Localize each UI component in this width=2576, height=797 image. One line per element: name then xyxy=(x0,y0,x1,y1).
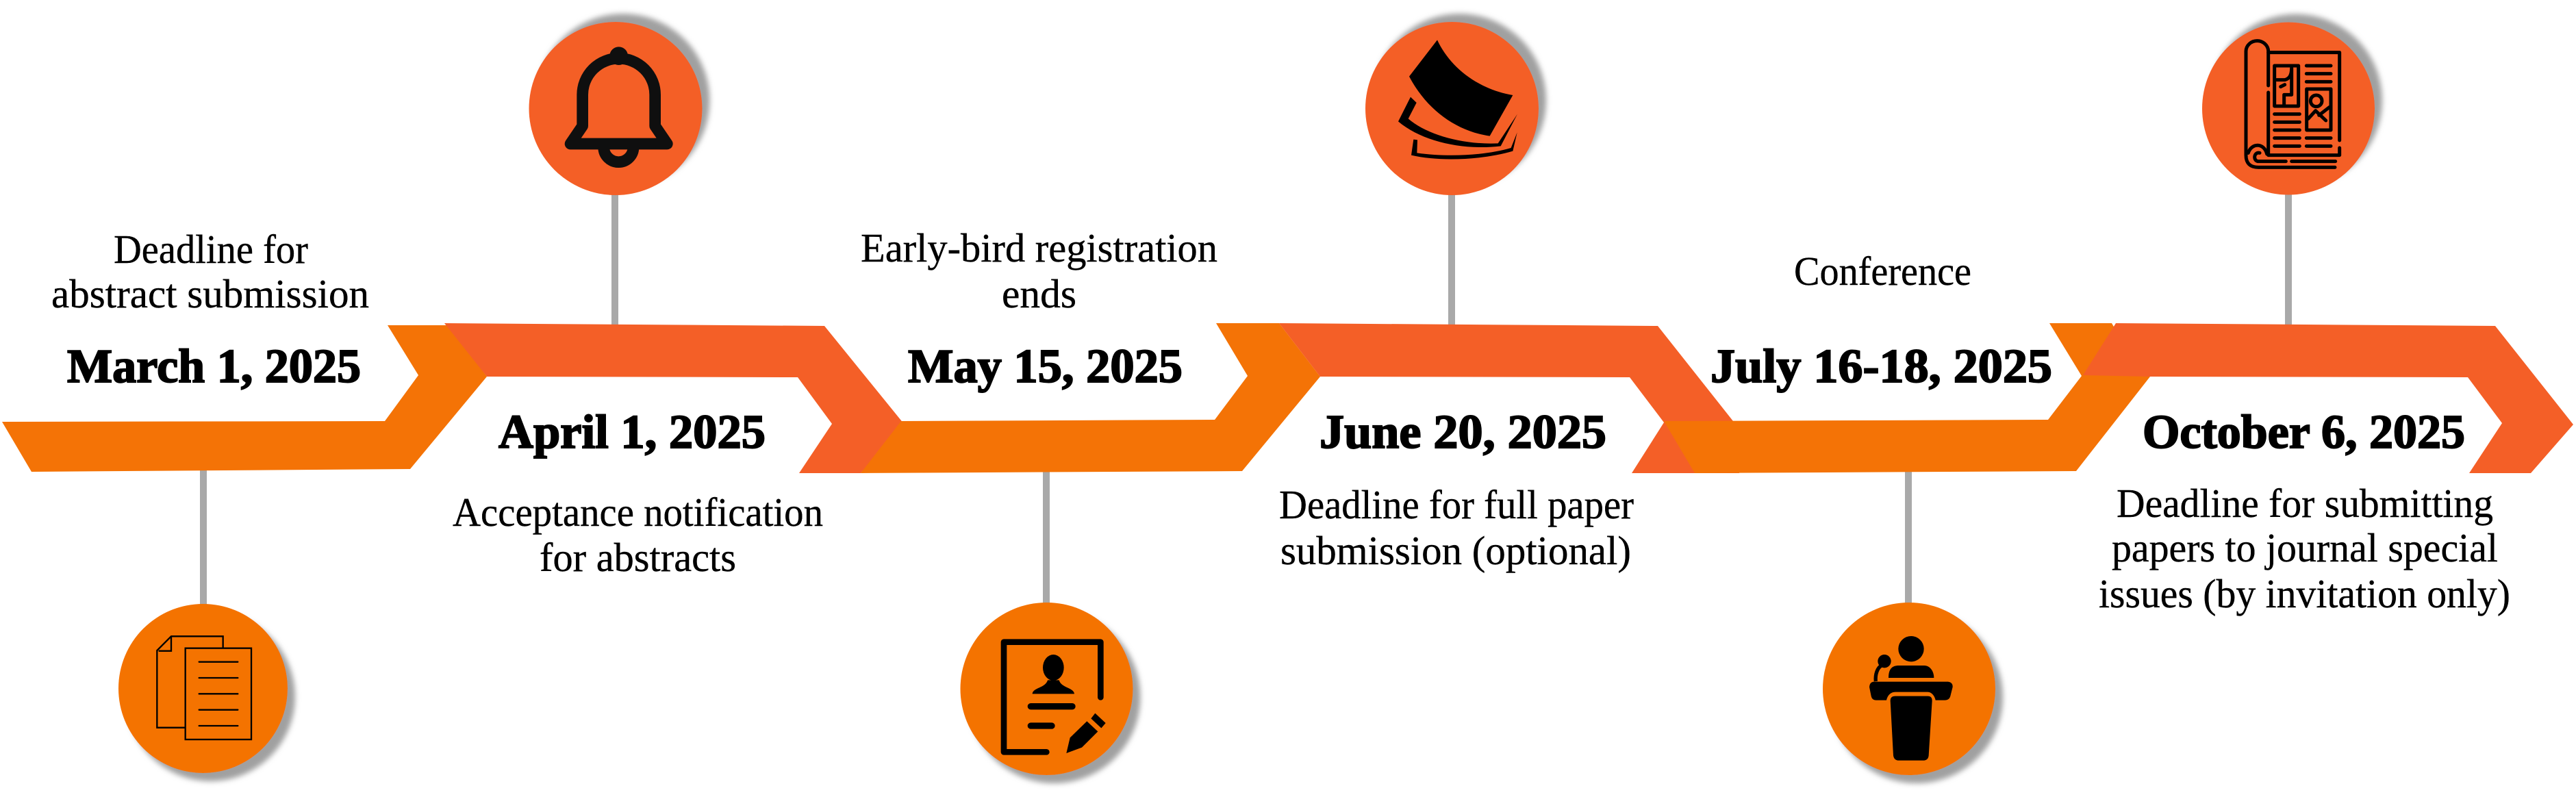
connector: June xyxy=(1448,192,1455,325)
arrow band: October xyxy=(2083,323,2573,473)
arrow band: April xyxy=(444,323,904,473)
text: abstract submission deadline: Deadline for xyxy=(114,227,308,272)
text: full paper deadline: Deadline for full paper xyxy=(1279,482,1634,527)
connector: October xyxy=(2285,192,2292,325)
icon: bell xyxy=(570,47,667,162)
text: acceptance notification: for abstracts xyxy=(540,535,736,580)
circle: March xyxy=(118,604,288,773)
circle: May xyxy=(960,603,1133,775)
text: conference: Conference xyxy=(1794,249,1971,294)
date: May 15, 2025: May 15, 2025 xyxy=(908,340,1183,393)
text: journal special issues deadline: issues (by invitation only) xyxy=(2099,571,2510,616)
text: early-bird registration: Early-bird registration xyxy=(861,225,1217,270)
text: early-bird registration xyxy=(861,225,1217,316)
text: acceptance notification: Acceptance notification xyxy=(453,490,823,535)
connector: March xyxy=(200,469,207,606)
text: full paper deadline xyxy=(1279,482,1634,573)
icon: paper stack xyxy=(1398,40,1517,160)
circle: April xyxy=(529,22,703,195)
icon: speaker at podium xyxy=(1869,636,1953,761)
text: early-bird registration: ends xyxy=(1002,271,1076,316)
connector: April xyxy=(611,192,618,325)
text: journal special issues deadline: Deadline for submitting xyxy=(2117,481,2493,526)
icon: documents xyxy=(157,636,251,739)
arrow band: June xyxy=(1279,323,1739,473)
arrow band: July xyxy=(1664,323,2150,473)
text: journal special issues deadline xyxy=(2099,481,2510,616)
text: full paper deadline: submission (optional) xyxy=(1280,528,1631,573)
date: June 20, 2025: June 20, 2025 xyxy=(1319,406,1606,459)
text: abstract submission deadline xyxy=(51,227,369,316)
date: October 6, 2025: October 6, 2025 xyxy=(2143,406,2465,459)
arrow band: May xyxy=(861,323,1320,473)
arrow band: March xyxy=(2,325,487,472)
date: March 1, 2025: March 1, 2025 xyxy=(67,340,361,393)
circle: July xyxy=(1823,603,1995,775)
icon: journal xyxy=(2246,41,2340,167)
text: acceptance notification xyxy=(453,490,823,580)
date: April 1, 2025: April 1, 2025 xyxy=(498,406,766,459)
connector: July xyxy=(1905,469,1912,605)
icon: registration form xyxy=(1004,642,1106,753)
text: abstract submission deadline: abstract submission xyxy=(51,271,369,316)
circle: June xyxy=(1365,22,1539,195)
circle: October xyxy=(2202,22,2375,194)
text: journal special issues deadline: papers to journal special xyxy=(2112,525,2498,570)
connector: May xyxy=(1043,469,1050,605)
date: July 16-18, 2025: July 16-18, 2025 xyxy=(1710,340,2052,393)
